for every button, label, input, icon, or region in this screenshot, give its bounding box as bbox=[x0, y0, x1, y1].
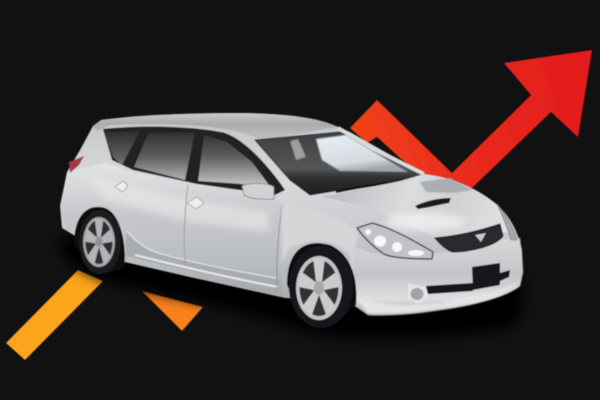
front side window bbox=[198, 135, 272, 189]
front bumper bbox=[354, 238, 523, 315]
hood bbox=[322, 174, 510, 240]
bumper lip bbox=[355, 283, 518, 314]
middle side window bbox=[134, 132, 195, 180]
roof panel bbox=[93, 113, 338, 140]
grille emblem bbox=[475, 233, 486, 242]
arrow: rising zigzag, upper red segment with head bbox=[350, 50, 592, 190]
rear wheel bbox=[74, 207, 125, 275]
side marker right bbox=[497, 204, 517, 240]
crease bright strip bbox=[127, 231, 277, 278]
hood highlight bbox=[385, 213, 465, 231]
fender bbox=[282, 205, 358, 300]
side highlight bbox=[88, 176, 270, 232]
windshield bbox=[255, 132, 422, 195]
side panels bbox=[60, 163, 284, 297]
lower intake bbox=[426, 283, 473, 294]
arrow: lower orange-yellow segment bbox=[6, 270, 103, 360]
headlight lens bbox=[365, 229, 424, 256]
wiper bbox=[336, 176, 428, 192]
car bbox=[60, 113, 523, 328]
lower intake right bbox=[500, 270, 510, 281]
car shadow bbox=[58, 215, 523, 338]
headlight bbox=[357, 223, 433, 259]
windshield glare bbox=[316, 135, 408, 172]
seat reflection bbox=[290, 139, 306, 160]
tail light bbox=[69, 156, 84, 173]
door mirror bbox=[242, 184, 274, 199]
licence plate bbox=[472, 263, 500, 290]
rear quarter window bbox=[104, 131, 140, 165]
front door seam bbox=[277, 205, 282, 290]
windshield highlight frame bbox=[338, 128, 424, 174]
grille bbox=[435, 224, 503, 252]
hood grey reflection bbox=[420, 178, 472, 193]
arrow: orange middle fragment bbox=[142, 291, 203, 331]
car body silhouette bbox=[60, 113, 523, 315]
sill bright strip bbox=[135, 255, 278, 287]
front wheel bbox=[287, 243, 356, 328]
sill crease band bbox=[126, 232, 279, 287]
hood scoop bbox=[415, 198, 451, 209]
door seam bbox=[184, 185, 188, 266]
window surround bbox=[103, 127, 285, 195]
fog lamp bbox=[408, 283, 428, 304]
rear door handle bbox=[115, 181, 128, 192]
front door handle bbox=[187, 197, 204, 209]
